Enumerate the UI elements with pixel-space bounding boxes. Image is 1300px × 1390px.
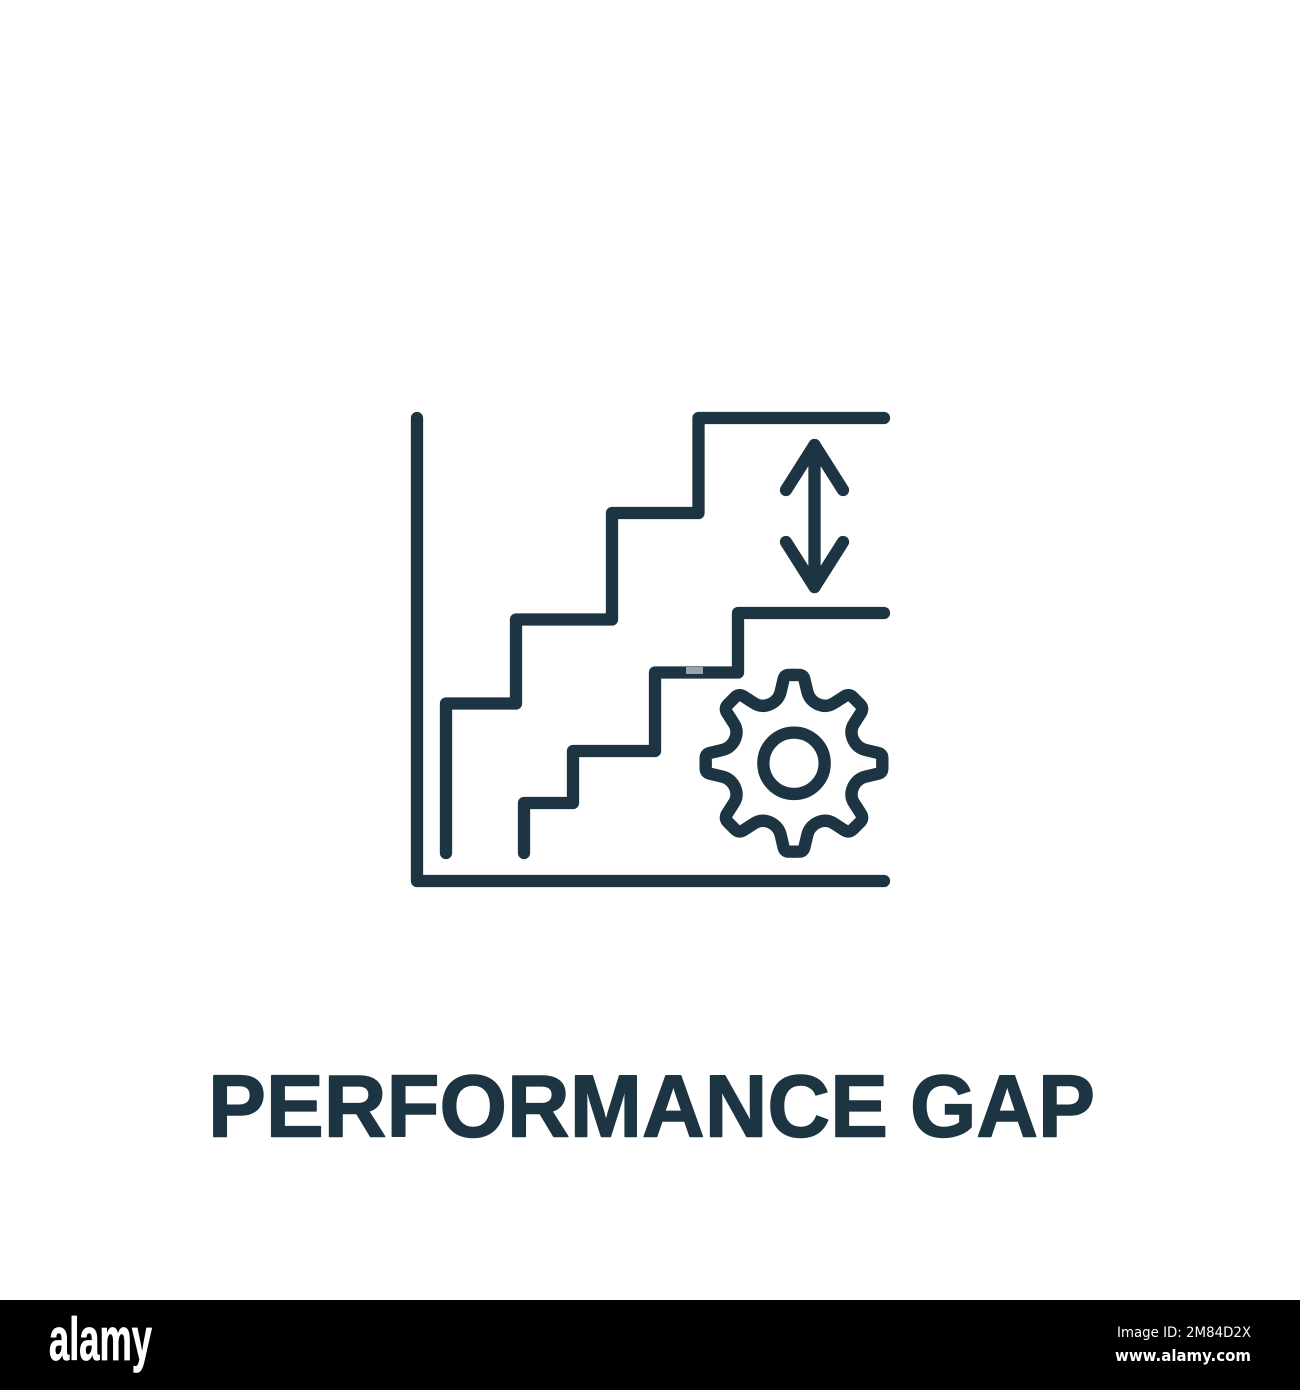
- alamy logo: alamy: [49, 1306, 152, 1373]
- website: www.alamy.com: [1115, 1346, 1251, 1365]
- footer bar: [0, 1300, 1300, 1390]
- lower staircase line: [524, 613, 884, 853]
- icon: performance gap chart: [417, 418, 884, 881]
- upper staircase line: [446, 418, 884, 853]
- title: PERFORMANCE: [208, 1056, 888, 1155]
- icon: double-headed gap arrow: [786, 445, 843, 587]
- image id: Image ID: 2M84D2X: [1117, 1325, 1251, 1341]
- icon: gear: [706, 675, 882, 852]
- title: GAP: [910, 1056, 1095, 1155]
- chart axes: [417, 418, 884, 881]
